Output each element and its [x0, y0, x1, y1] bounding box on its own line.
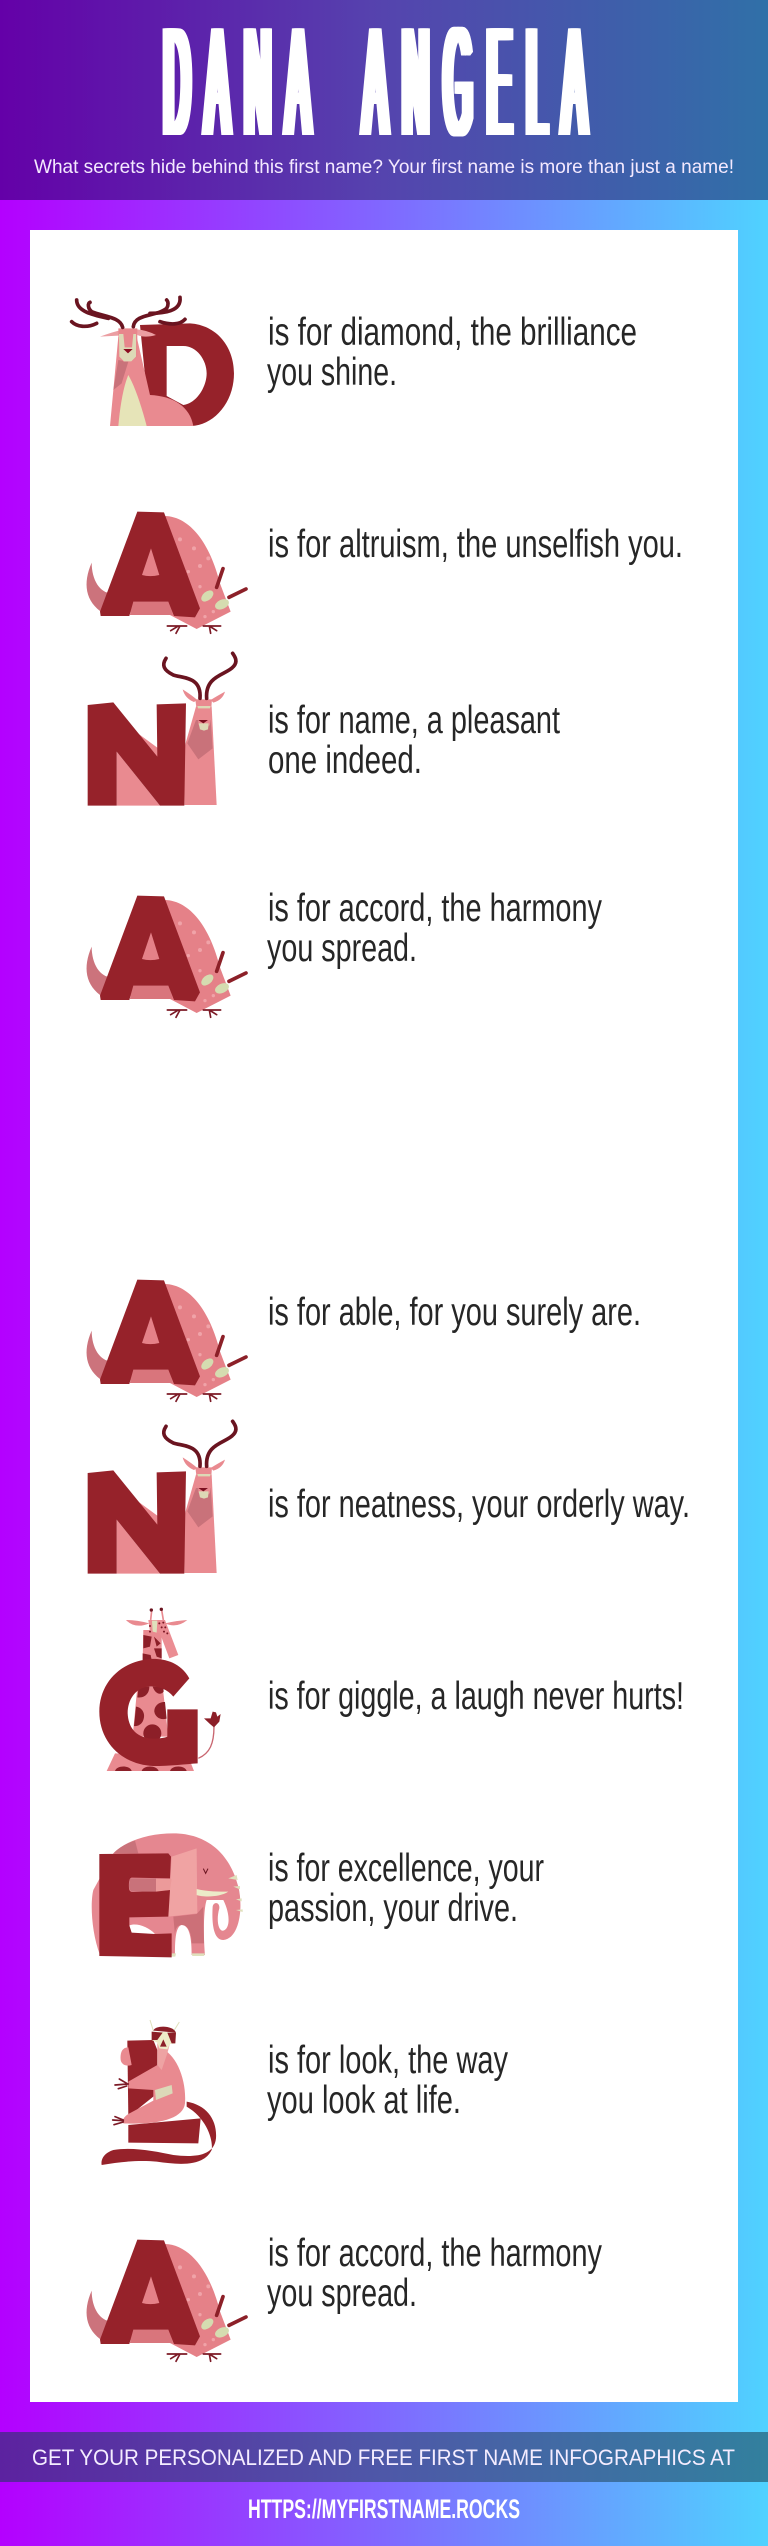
text: E: passion, your drive. [268, 1887, 518, 1930]
text: L [267, 2039, 508, 2122]
row: G [99, 1608, 684, 1771]
icon: armadillo letter A [87, 512, 246, 633]
icon: deer letter D [72, 297, 234, 426]
row: A altruism [87, 512, 683, 633]
text: N name [268, 699, 560, 782]
footer url: HTTPS://MYFIRSTNAME.ROCKS [248, 2494, 520, 2524]
row: E [92, 1833, 544, 1957]
footer band [0, 2432, 768, 2482]
text: E [268, 1847, 544, 1930]
footer call to action: GET YOUR PERSONALIZED AND FREE FIRST NAME INFOGRAPHICS AT [32, 2445, 735, 2470]
icon: gazelle letter N [88, 653, 236, 806]
header band [0, 0, 768, 200]
text: A accord: you spread. [267, 927, 417, 970]
text: A accord [267, 887, 602, 970]
text: E: is for excellence, your [268, 1847, 544, 1890]
text: L: you look at life. [267, 2079, 461, 2122]
text: L: is for look, the way [268, 2039, 508, 2082]
text: A able: is for able, for you surely are. [268, 1291, 641, 1334]
row: L [101, 2020, 508, 2165]
title: DANA ANGELA [164, 0, 602, 168]
text: A accord second: you spread. [267, 2272, 417, 2315]
text: N name: one indeed. [268, 739, 422, 782]
icon: giraffe letter G [99, 1608, 221, 1771]
row: N name [88, 653, 560, 806]
icon: elephant letter E [92, 1833, 243, 1957]
icon: armadillo letter A [87, 2240, 246, 2361]
text: A accord second: is for accord, the harmony [268, 2232, 602, 2275]
icon: armadillo letter A [87, 896, 246, 1017]
row: A accord [87, 887, 602, 1017]
text: A accord: is for accord, the harmony [268, 887, 602, 930]
icon: monkey letter L [101, 2020, 216, 2165]
white content panel [30, 230, 738, 2402]
text: D: you shine. [267, 351, 397, 394]
text: D [267, 311, 637, 394]
row: A able [87, 1280, 641, 1401]
row: D [72, 297, 637, 426]
text: N name: is for name, a pleasant [268, 699, 560, 742]
text: A accord second [267, 2232, 602, 2315]
row: A accord second [87, 2232, 602, 2361]
icon: armadillo letter A [87, 1280, 246, 1401]
text: D: is for diamond, the brilliance [268, 311, 637, 354]
icon: gazelle letter N [88, 1421, 236, 1574]
row: N neatness [88, 1421, 690, 1574]
subtitle: What secrets hide behind this first name? Your first name is more than just a name! [34, 156, 734, 178]
